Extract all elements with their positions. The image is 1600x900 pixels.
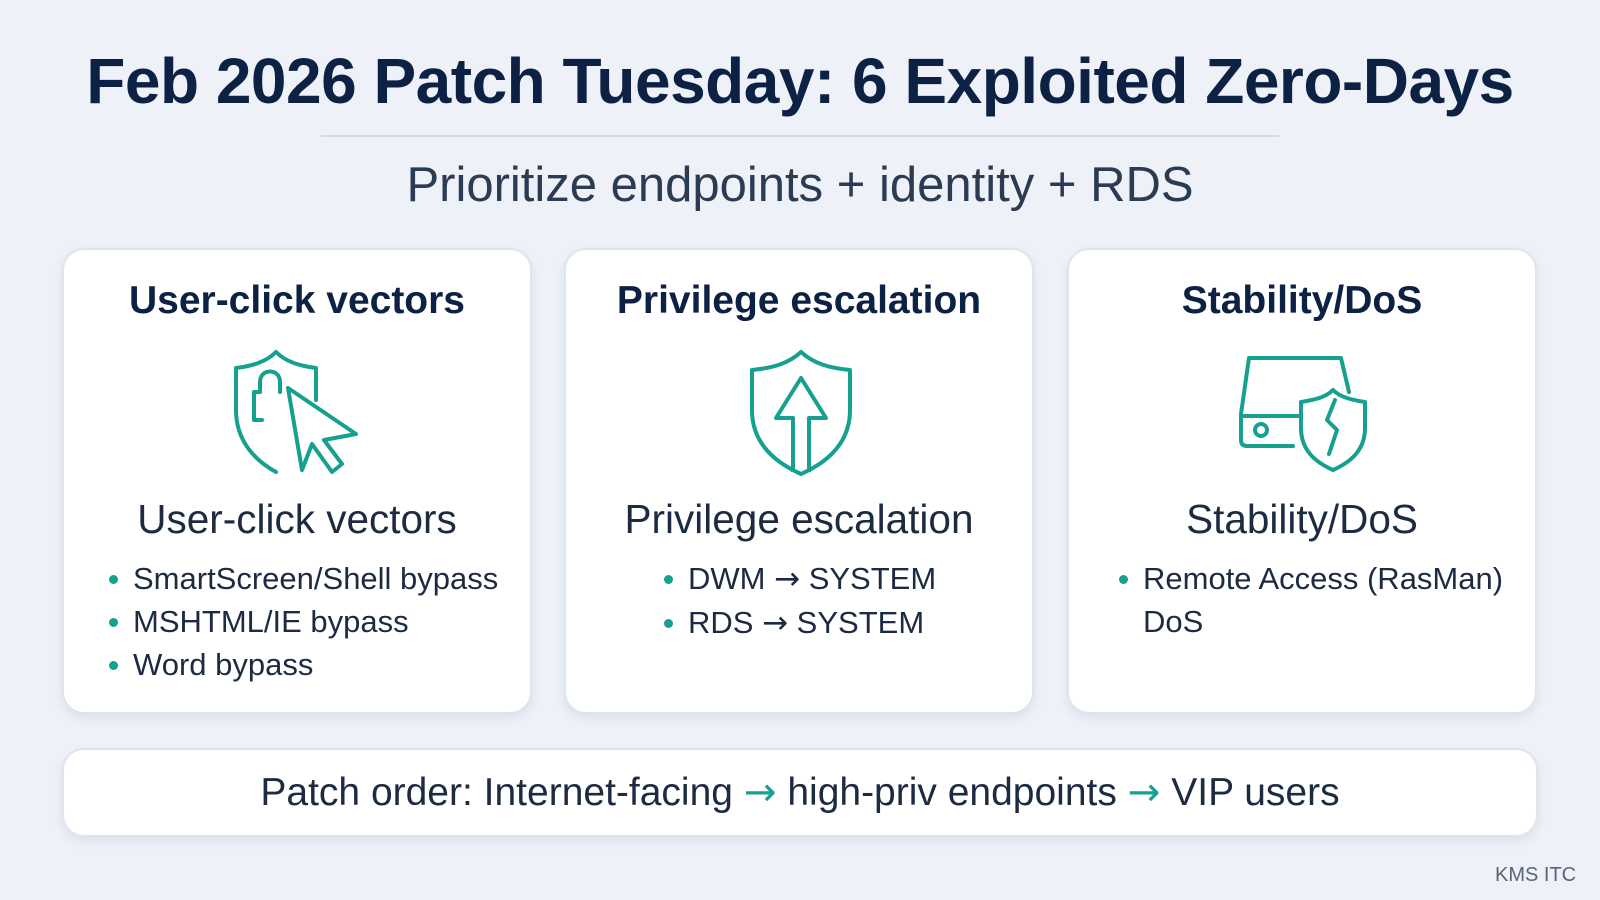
footer credit: KMS ITC: [1495, 864, 1576, 886]
bullet list: RDS → SYSTEM: [688, 605, 924, 641]
panel: user-click vectors: [62, 248, 532, 714]
panel: privilege escalation: [564, 248, 1034, 714]
heading: Privilege escalation: [617, 279, 981, 322]
heading: Stability/DoS: [1182, 279, 1422, 322]
bullet list: SmartScreen/Shell bypass: [133, 561, 498, 596]
heading: User-click vectors: [129, 279, 465, 322]
subheading: Stability/DoS: [1186, 496, 1418, 542]
subtitle: Prioritize endpoints + identity + RDS: [406, 158, 1194, 212]
subheading: Privilege escalation: [625, 496, 973, 542]
bullet list: DWM → SYSTEM: [688, 561, 936, 597]
bullet list: [1119, 561, 1503, 639]
icon: drive with cracked shield: [1239, 356, 1367, 472]
bullet list: [664, 561, 936, 641]
bottom bar: patch order: [62, 748, 1538, 837]
bottom bar: patch order: Patch order: Internet-facing → high-priv endpoints → VIP users: [260, 770, 1340, 815]
bullet list: Remote Access (RasMan): [1143, 561, 1503, 596]
bullet list: Word bypass: [133, 647, 313, 682]
icon: shield lock cursor: [234, 350, 358, 474]
bullet list: DoS: [1143, 604, 1203, 639]
icon: shield up arrow: [750, 350, 852, 476]
panel: stability/DoS: [1067, 248, 1537, 714]
bullet list: MSHTML/IE bypass: [133, 604, 409, 639]
bullet list: [109, 561, 498, 682]
subheading: User-click vectors: [137, 496, 457, 542]
title: Feb 2026 Patch Tuesday: 6 Exploited Zero-Days: [86, 45, 1514, 117]
